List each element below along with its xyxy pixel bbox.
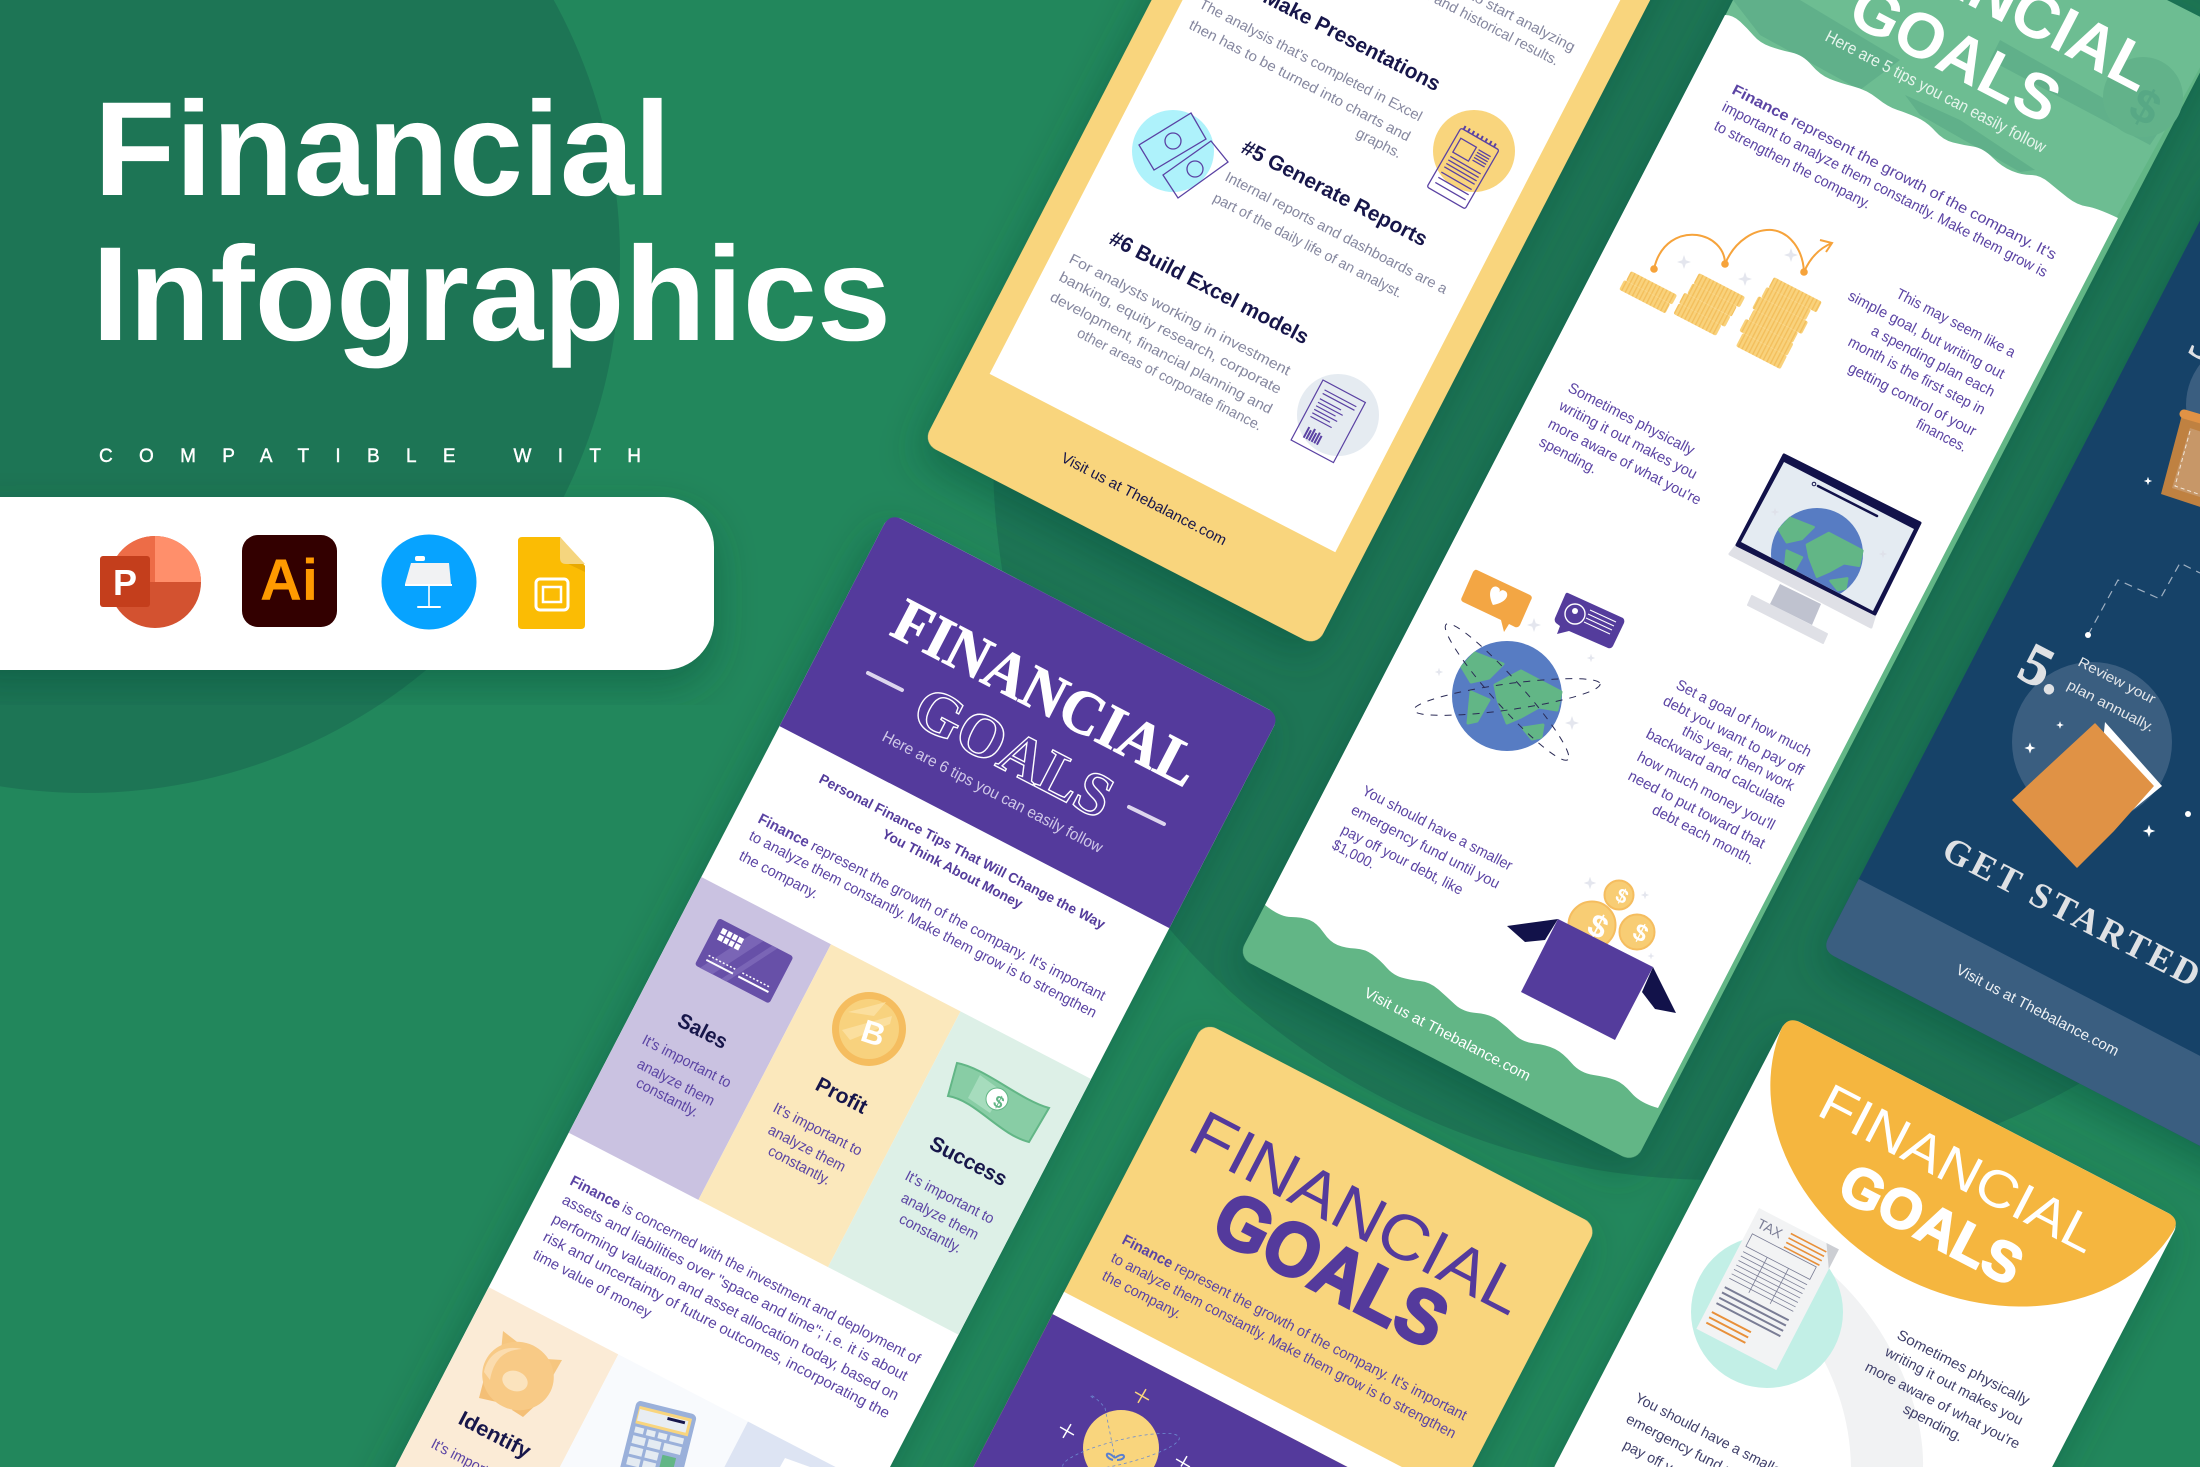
card: navy get started template: [1822, 151, 2200, 1226]
panel: success: Success: [926, 1132, 1011, 1191]
text: sometimes physically: writing it out makes you: [1881, 1344, 2025, 1429]
header wave: [1713, 0, 2200, 240]
text: emergency fund: pay off your debt, like: [1338, 821, 1466, 899]
subtitle: Here are 5 tips you can easily follow: [1822, 27, 2050, 157]
panel: identify: [428, 1407, 535, 1467]
text: finance intro: to analyze them constantly. Make them grow is to strengthen: [746, 827, 1099, 1022]
subtitle: Here are 6 tips you can easily follow: [879, 728, 1106, 857]
text: sometimes physically: Sometimes physically: [1894, 1327, 2033, 1410]
title: Financial: [94, 75, 671, 224]
text: sometimes physically: Sometimes physically: [1565, 379, 1698, 459]
title: goals outline: GOALS: [903, 673, 1125, 832]
text: simple goal: [1845, 285, 2019, 456]
text: finance intro: Finance represent the growth of the company. It's important: [755, 810, 1109, 1005]
icon: coin stacks with arrow: [1619, 230, 1832, 372]
footer: visit us: Visit us at Thebalance.com: [1058, 449, 1229, 549]
text: set a goal: [1625, 676, 1814, 869]
text: simple goal: simple goal, but writing out: [1845, 287, 2008, 383]
text: presentations body: graphs.: [1353, 125, 1404, 162]
panel: sales: It's important to: [639, 1031, 734, 1092]
panel: success: [896, 1132, 1011, 1257]
text: excel body: development, financial planning and: [1047, 289, 1275, 418]
icon: notebook: [1427, 110, 1515, 209]
text: review your plan: [2065, 653, 2159, 735]
text: emergency fund: $1,000.: [1329, 836, 1378, 873]
icon: google slides: [518, 537, 585, 629]
panel: success: constantly.: [896, 1210, 964, 1257]
text: finance is concerned: risk and uncertainty of future outcomes, incorporating the: [540, 1228, 892, 1422]
text: simple goal: getting control of your: [1845, 359, 1979, 440]
text: finance intro: the company.: [736, 847, 821, 903]
panel: success: analyze them: [898, 1189, 981, 1244]
card: purple goals template: [338, 513, 1280, 1467]
text: set a goal: debt you want to pay off: [1660, 692, 1807, 780]
background circle: top left: [0, 0, 620, 793]
text: emergency fund: emergency fund until you: [1348, 801, 1502, 892]
icon: planet with orbit: [1056, 1385, 1194, 1467]
icon: folder: [2013, 722, 2162, 867]
icon: banknotes: [1132, 110, 1228, 198]
icon: illustrator: Ai: [260, 548, 318, 613]
text: simple goal: finances.: [1913, 415, 1970, 456]
text: set a goal: debt each month.: [1649, 801, 1757, 869]
icon: powerpoint: P: [113, 562, 137, 603]
panel: sales: Sales: [674, 1009, 731, 1054]
icon: step circle: [2186, 339, 2200, 471]
title: goals: GOALS: [1829, 1151, 2033, 1297]
text: finance is concerned: assets and liabilities over "space and time"; i.e. it is about: [559, 1191, 911, 1385]
text: excel body: banking, equity research, corporate: [1056, 269, 1284, 398]
text: review your plan: plan annually.: [2065, 676, 2157, 735]
text: finance intro: the company.: [1099, 1267, 1184, 1323]
panel: profit: constantly.: [765, 1142, 833, 1189]
heading: build excel models: #6 Build Excel models: [1106, 227, 1312, 349]
icon: open box with coins: [1507, 877, 1676, 1040]
text: presentations body: then has to be turned into charts and: [1186, 17, 1413, 145]
icon: bitcoin: [832, 992, 906, 1066]
background circle: behind cards: [993, 0, 2200, 1180]
icon: document corner: [780, 1458, 810, 1467]
card: yellow and purple goals template: [946, 1022, 1597, 1467]
text: simple goal: This may seem like a: [1893, 285, 2019, 362]
panel: profit: Profit: [812, 1073, 871, 1119]
title: financial: FINANCIAL: [882, 586, 1210, 801]
card: green goals template: [1238, 0, 2200, 1163]
icon: orange speech bubble with heart: [1461, 570, 1532, 632]
text: finance intro: important to analyze them constantly. Make them grow is: [1719, 98, 2050, 281]
icon: purple speech bubble with profile: [1555, 593, 1624, 648]
icon: piggy bank: [473, 1331, 563, 1420]
panel: identify: Identify: [455, 1407, 535, 1463]
panel: software pill: [0, 497, 714, 670]
text: finance is concerned: Finance is concerned with the investment and deployment of: [567, 1172, 924, 1368]
text: sometimes physically: spending.: [1900, 1401, 1965, 1445]
text: review your plan: Review your: [2076, 653, 2159, 707]
icon: wallet: [2161, 414, 2200, 520]
icon: open box with coins: $: [1628, 918, 1653, 949]
text: sometimes physically: more aware of what you're: [1545, 415, 1704, 509]
footer: visit us: Visit us at Thebalance.com: [1361, 984, 1533, 1085]
title: goals: GOALS: [1200, 1175, 1461, 1365]
text: finance is concerned: performing valuation and asset allocation today, based on: [549, 1210, 901, 1404]
heading: personal finance tips: Personal Finance Tips That Will Change the Way: [817, 770, 1108, 932]
text: emergency fund: [1329, 782, 1515, 899]
panel: profit: analyze them: [765, 1121, 848, 1176]
path: dashed connector: [2085, 563, 2200, 638]
icon: powerpoint: [100, 536, 201, 628]
panel: sales: constantly.: [633, 1074, 701, 1121]
icon: receipt: [1291, 374, 1379, 463]
text: finance intro: Finance represent the growth of the company. It's: [1729, 81, 2059, 264]
panel: success: It's important to: [902, 1167, 997, 1228]
icon: illustrator: [242, 535, 337, 627]
footer: visit us: Visit us at Thebalance.com: [1953, 961, 2122, 1060]
text: finance intro: to analyze them constantly. Make them grow is to strengthen: [1108, 1249, 1459, 1442]
text: set a goal: need to put toward that: [1625, 767, 1769, 853]
icons: stars: [2024, 721, 2191, 837]
text: excel body: [1047, 251, 1293, 434]
white body with waves: [1265, 15, 2118, 1108]
text: sometimes physically: [1536, 379, 1704, 509]
icon: credit card: [695, 918, 794, 1004]
number: 5: 5.: [2009, 630, 2078, 708]
card: yellow report template: [923, 0, 1729, 646]
icon: tax document: [1691, 1208, 1843, 1388]
text: finance intro: to strengthen the company.: [1711, 117, 1873, 213]
text: sometimes physically: more aware of what you're: [1862, 1359, 2022, 1453]
text: emergency fund: You should have a smaller: [1359, 782, 1515, 874]
text: sometimes physically: writing it out makes you: [1555, 397, 1700, 483]
text: presentations body: The analysis that's completed in Excel: [1196, 0, 1425, 125]
icon: tax document: TAX: [1755, 1215, 1786, 1242]
text: set a goal: Set a goal of how much: [1673, 676, 1814, 761]
icon: banknote: $: [990, 1092, 1008, 1113]
step five: [2009, 630, 2191, 867]
text: set a goal: this year, then work: [1679, 722, 1797, 795]
text: sometimes physically: spending.: [1536, 433, 1600, 478]
title: financial: FINANCIAL: [1179, 1097, 1537, 1329]
icon: globe with orbits: [1412, 615, 1602, 769]
icon: open box with coins: $: [1582, 906, 1614, 946]
title: financial: FINANCIAL: [1809, 1073, 2107, 1265]
text: simple goal: a spending plan each: [1868, 322, 1998, 401]
text: simple goal: month is the first step in: [1845, 333, 1988, 419]
heading: get started: GET STARTED: [1936, 829, 2200, 995]
text: excel body: For analysts working in investment: [1066, 251, 1293, 379]
text: finance is concerned: time value of money: [530, 1246, 655, 1322]
icon: calculator: [617, 1400, 697, 1467]
heading: generate reports: #5 Generate Reports: [1238, 136, 1431, 251]
text: reports body: Internal reports and dashboards are a: [1222, 169, 1451, 298]
panel: sales: [633, 1009, 734, 1121]
panel: profit: [765, 1073, 871, 1189]
title: Infographics: [92, 220, 891, 369]
path: grey road: [1780, 1250, 1923, 1467]
text: set a goal: backward and calculate: [1643, 725, 1789, 812]
icon: bitcoin: B: [857, 1012, 890, 1054]
icon: keynote: [382, 534, 476, 630]
text: reports body: part of the daily life of an analyst.: [1210, 190, 1405, 302]
text: sometimes physically: [1862, 1327, 2033, 1453]
icon: banknote: [948, 1063, 1049, 1142]
icon: open box with coins: $: [1612, 884, 1632, 909]
card: orange tax template: [1549, 1016, 2180, 1467]
panel: sales: analyze them: [634, 1055, 717, 1110]
icon: star: [2144, 477, 2152, 485]
heading: personal finance tips: You Think About Money: [880, 825, 1026, 912]
text: set a goal: how much money you'll: [1634, 748, 1778, 834]
title dashes: [868, 673, 1164, 824]
title: [92, 75, 891, 369]
header wave: $: [2121, 78, 2169, 137]
text: finance intro: Finance represent the growth of the company. It's important: [1119, 1231, 1470, 1425]
icon: monitor with globe: [1730, 455, 1920, 643]
panel: profit: It's important to: [770, 1099, 865, 1160]
subtitle: compatible with: COMPATIBLE WITH: [99, 446, 641, 467]
text: excel body: other areas of corporate finance.: [1074, 325, 1264, 434]
